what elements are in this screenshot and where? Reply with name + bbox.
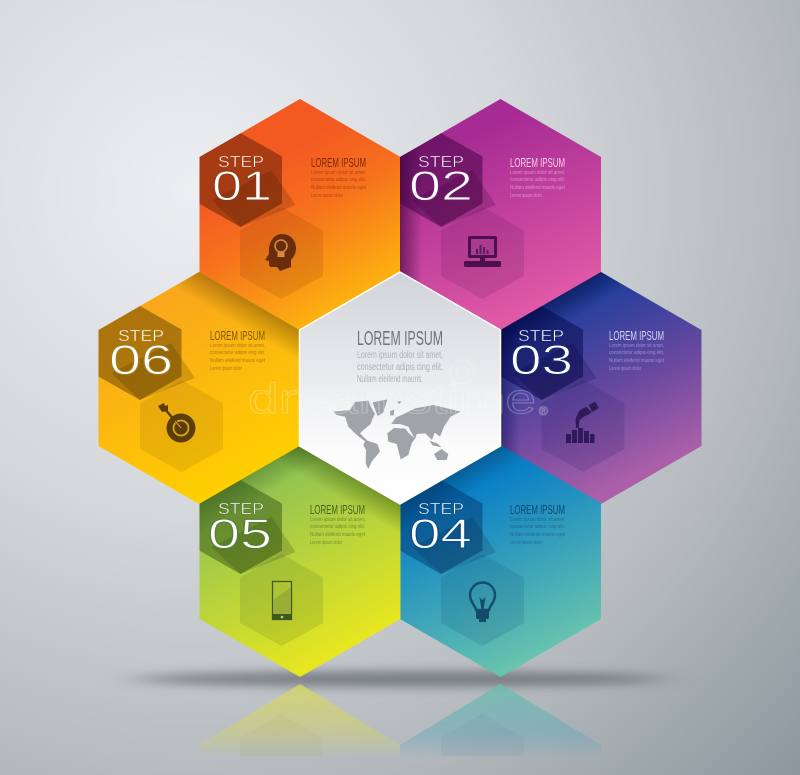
world map (333, 399, 461, 469)
text block: Lorem ipsum dolor (609, 366, 641, 372)
text block: consectetur adipis cing elit. (210, 350, 265, 356)
text block: consectetur adipis cing elit. (510, 524, 565, 530)
centre title: LOREM IPSUM (357, 328, 443, 350)
step label: STEP (518, 328, 564, 345)
icon: hand placing bar chart (566, 402, 599, 443)
text block (510, 155, 565, 199)
reflection: step 04 (400, 684, 601, 758)
step label: STEP (218, 501, 264, 518)
text block: LOREM IPSUM (510, 502, 565, 517)
text block: Lorem ipsum dolor sit amet, (310, 517, 365, 523)
text block: LOREM IPSUM (510, 155, 565, 170)
icon: computer with chart (464, 236, 501, 267)
panel: step 01 (199, 99, 400, 331)
text block (311, 155, 366, 199)
text block: Lorem ipsum dolor (510, 540, 542, 546)
text block (310, 502, 365, 546)
text block: consectetur adipis cing elit. (510, 177, 565, 183)
text block: LOREM IPSUM (310, 502, 365, 517)
text block: consectetur adipis cing elit. (609, 350, 664, 356)
text block: Lorem ipsum dolor (510, 193, 542, 199)
text block: Nullam eleifend mauris eget (311, 185, 366, 191)
text block (510, 502, 565, 546)
step number: 02 (409, 162, 473, 209)
centre text block: Nullam eleifend mauris. (357, 374, 423, 385)
step label: STEP (418, 154, 464, 171)
panel: step 05 (199, 445, 401, 677)
centre text block (357, 350, 443, 385)
text block: Lorem ipsum dolor sit amet, (510, 517, 565, 523)
step label: STEP (118, 328, 164, 345)
text block: Nullam eleifend mauris eget (310, 532, 365, 538)
text block: Lorem ipsum dolor (210, 366, 242, 372)
step label: STEP (418, 501, 464, 518)
text block: consectetur adipis cing elit. (311, 177, 366, 183)
text block: Lorem ipsum dolor (310, 540, 342, 546)
panel: step 06 (98, 272, 300, 504)
text block: LOREM IPSUM (210, 328, 265, 343)
step label: STEP (218, 154, 264, 171)
text block: Lorem ipsum dolor sit amet, (210, 343, 265, 349)
centre text block: Lorem ipsum dolor sit amet, (357, 350, 443, 361)
text block (609, 328, 664, 372)
step number: 03 (510, 336, 573, 383)
text block: Nullam eleifend mauris eget (510, 532, 565, 538)
text block: Lorem ipsum dolor sit amet, (609, 343, 664, 349)
icon: dart target (158, 403, 196, 442)
panel: step 04 (400, 445, 601, 677)
watermark: dreamstime (248, 375, 536, 422)
text block: consectetur adipis cing elit. (310, 524, 365, 530)
text block: Nullam eleifend mauris eget (510, 185, 565, 191)
watermark (248, 360, 548, 422)
watermark: ® (539, 404, 548, 418)
step number: 04 (409, 510, 472, 557)
step number: 01 (212, 162, 272, 209)
icon: smartphone (272, 582, 292, 620)
text block: LOREM IPSUM (311, 155, 366, 170)
text block: Lorem ipsum dolor sit amet, (311, 170, 366, 176)
panel: step 03 (500, 272, 702, 504)
reflection: step 05 (199, 684, 400, 758)
text block: Lorem ipsum dolor (311, 193, 343, 199)
panel: step 02 (400, 99, 601, 331)
text block: Nullam eleifend mauris eget (210, 358, 265, 364)
panel: centre hexagon (300, 272, 500, 504)
text block (210, 328, 265, 372)
step number: 06 (109, 336, 173, 383)
text block: Nullam eleifend mauris eget (609, 358, 664, 364)
step number: 05 (208, 510, 272, 557)
icon: light bulb (470, 582, 495, 622)
icon: head with light bulb (265, 234, 296, 271)
centre text block: consectetur adipis cing elit. (357, 362, 443, 373)
text block: Lorem ipsum dolor sit amet, (510, 170, 565, 176)
floor shadow (135, 671, 665, 687)
text block: LOREM IPSUM (609, 328, 664, 343)
